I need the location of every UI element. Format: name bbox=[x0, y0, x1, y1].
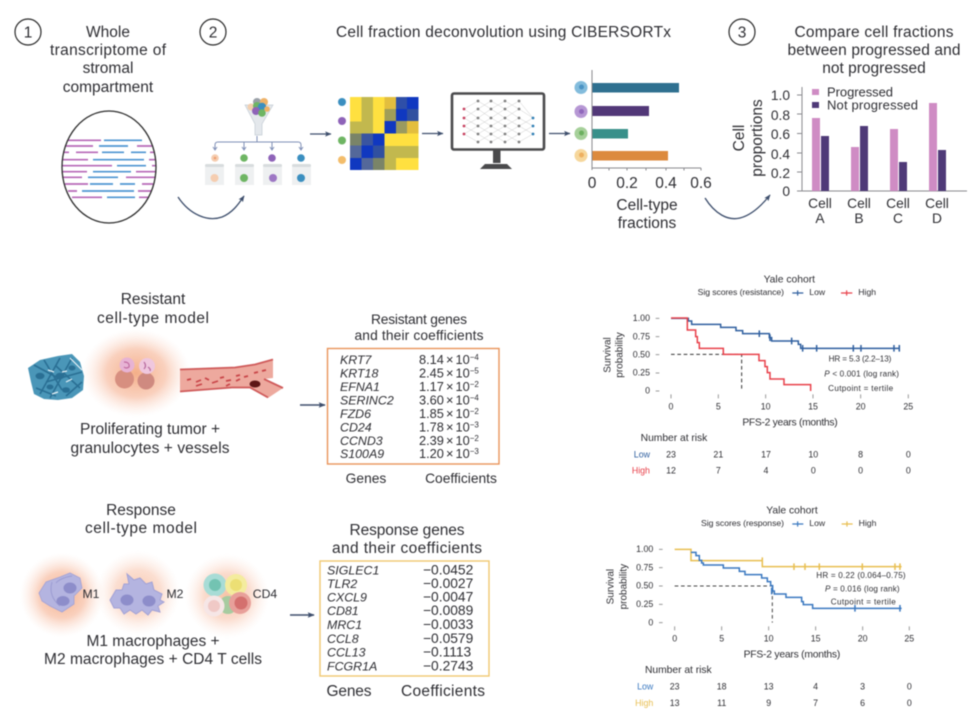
response model caption bbox=[44, 633, 262, 668]
statistics bbox=[824, 355, 899, 393]
statistics: HR = 5.3 (2.2–13) bbox=[829, 355, 892, 364]
gene names: CCL8 bbox=[327, 632, 359, 646]
tick labels bbox=[588, 175, 712, 192]
legend: Progressed bbox=[827, 84, 893, 100]
chart title: Yale cohort bbox=[764, 274, 815, 285]
icon: granulocytes with glow bbox=[82, 329, 190, 417]
number at risk table: 4 bbox=[764, 466, 769, 476]
legend: Sig scores (resistance) bbox=[698, 287, 784, 297]
number at risk table: Low bbox=[634, 449, 651, 459]
coefficients: −4 bbox=[470, 353, 479, 362]
y axis: 0.75 bbox=[633, 331, 650, 341]
resistant table column labels: Coefficients bbox=[425, 471, 497, 486]
number at risk table: 9 bbox=[766, 698, 771, 708]
gene names bbox=[327, 564, 379, 674]
coefficients: −0.0089 bbox=[423, 603, 474, 618]
y axis title bbox=[606, 564, 630, 609]
icon: funnel cell sorting bbox=[205, 98, 311, 185]
x axis: 10 bbox=[764, 634, 774, 644]
category labels bbox=[808, 196, 949, 226]
curved arrow to sorting bbox=[178, 196, 244, 219]
gene names: CCND3 bbox=[340, 434, 383, 448]
coefficients: 3.60 × 10 bbox=[419, 392, 470, 408]
step 1 badge: 1 bbox=[24, 24, 32, 42]
y axis: 0.75 bbox=[636, 562, 653, 572]
step 2 badge bbox=[200, 19, 226, 45]
legend bbox=[701, 518, 877, 528]
transcriptome circle bbox=[62, 111, 157, 223]
coefficients: −3 bbox=[470, 447, 479, 456]
gene names: KRT18 bbox=[340, 366, 378, 380]
number at risk table: 0 bbox=[907, 682, 912, 692]
axis title: Cell-type bbox=[616, 197, 678, 214]
coefficients: −0.1113 bbox=[423, 644, 472, 660]
coefficients: 1.20 × 10 bbox=[419, 446, 470, 461]
x axis: 20 bbox=[856, 402, 866, 412]
step 3 heading: Compare cell fractions bbox=[794, 24, 954, 41]
response genes heading: Response genes bbox=[350, 522, 465, 539]
resistant model caption: Proliferating tumor + bbox=[80, 421, 220, 438]
y axis title: Cell bbox=[731, 125, 748, 151]
coefficients: 1.17 × 10 bbox=[419, 379, 470, 394]
step 1 badge bbox=[15, 19, 41, 45]
y axis: 0.25 bbox=[633, 368, 650, 378]
gene names: CD24 bbox=[340, 420, 372, 434]
statistics: Cutpoint = tertile bbox=[828, 384, 894, 393]
number at risk table: 4 bbox=[813, 682, 818, 692]
number at risk table: Low bbox=[637, 682, 654, 692]
chart title: Yale cohort bbox=[766, 505, 818, 516]
number at risk table: 17 bbox=[761, 449, 771, 459]
number at risk table: 11 bbox=[717, 698, 726, 708]
response model heading bbox=[85, 502, 197, 537]
label M1: M1 bbox=[83, 587, 100, 601]
legend: Not progressed bbox=[827, 98, 918, 112]
low curve bbox=[671, 318, 900, 352]
number at risk table: 7 bbox=[813, 698, 818, 708]
coefficients: −2 bbox=[470, 434, 479, 443]
coefficients: −0.0027 bbox=[423, 576, 473, 591]
step 1 heading: compartment bbox=[63, 79, 154, 96]
low curve bbox=[691, 552, 902, 612]
y axis title: probability bbox=[619, 564, 630, 609]
gene names: FZD6 bbox=[340, 407, 371, 421]
x axis title: PFS-2 years (months) bbox=[742, 418, 838, 429]
number at risk table: 13 bbox=[670, 698, 680, 708]
step 3 heading bbox=[788, 24, 960, 77]
x axis: 10 bbox=[761, 402, 771, 412]
y axis title: Survival bbox=[606, 569, 617, 604]
resistant model caption: granulocytes + vessels bbox=[70, 440, 230, 457]
arrow to monitor bbox=[422, 132, 443, 134]
number at risk table: 10 bbox=[808, 449, 818, 459]
y tick labels: 0.6 bbox=[771, 127, 790, 142]
y axis: 0 bbox=[645, 386, 650, 396]
resistant genes heading: and their coefficients bbox=[354, 328, 484, 343]
step 1 heading bbox=[50, 24, 167, 96]
survival chart: response bbox=[606, 505, 914, 708]
x axis bbox=[669, 394, 913, 412]
neural network bbox=[464, 101, 533, 142]
coefficients: −0.0047 bbox=[423, 590, 473, 604]
y axis title: proportions bbox=[749, 99, 766, 177]
y tick labels: 0.2 bbox=[771, 166, 790, 181]
icon: CD4 T cells bbox=[185, 554, 277, 638]
response table column labels: Genes bbox=[326, 683, 372, 700]
heatmap bbox=[350, 97, 419, 170]
y axis title bbox=[731, 99, 766, 177]
response genes heading bbox=[332, 522, 482, 557]
coefficients bbox=[423, 562, 474, 674]
tick labels: 0.2 bbox=[616, 175, 638, 192]
resistant genes heading bbox=[354, 312, 484, 343]
gene names: SERINC2 bbox=[340, 394, 394, 408]
number at risk table: 21 bbox=[713, 449, 723, 459]
category labels: Cell bbox=[808, 196, 832, 211]
x axis: 5 bbox=[719, 634, 724, 644]
legend: Low bbox=[809, 287, 826, 297]
coefficients: −3 bbox=[470, 420, 479, 430]
step 2 badge: 2 bbox=[209, 24, 217, 42]
response table column labels bbox=[326, 683, 485, 700]
x axis: 15 bbox=[808, 402, 818, 412]
y axis: 1.00 bbox=[633, 313, 650, 323]
y axis title: probability bbox=[615, 332, 626, 378]
arrow to resistant genes bbox=[300, 404, 325, 406]
curved arrow to comparison bbox=[705, 195, 770, 219]
step 3 badge bbox=[729, 19, 755, 45]
y axis bbox=[636, 544, 663, 627]
y axis: 0 bbox=[648, 617, 653, 627]
median dashed guide bbox=[675, 586, 772, 623]
number at risk table: 0 bbox=[907, 698, 912, 708]
step 2 heading: Cell fraction deconvolution using CIBERSORTx bbox=[336, 24, 671, 41]
response model heading: cell-type model bbox=[85, 520, 197, 537]
resistant table column labels: Genes bbox=[346, 471, 386, 486]
x axis: 25 bbox=[904, 634, 914, 644]
coefficients: −4 bbox=[470, 394, 479, 402]
step 1 heading: Whole bbox=[86, 24, 130, 41]
icon: M1 macrophage bbox=[20, 553, 104, 637]
coefficients: −0.0452 bbox=[423, 562, 473, 578]
resistant model heading bbox=[97, 291, 209, 327]
arrow to heatmap bbox=[310, 133, 331, 135]
y tick labels bbox=[771, 88, 790, 199]
number at risk table: 12 bbox=[666, 466, 676, 476]
gene names: TLR2 bbox=[327, 577, 357, 591]
statistics: P < 0.001 (log rank) bbox=[824, 369, 899, 378]
number at risk table: High bbox=[632, 466, 650, 476]
survival chart: resistance bbox=[602, 274, 913, 476]
number at risk table: 0 bbox=[858, 466, 863, 476]
x axis: 15 bbox=[811, 634, 821, 644]
resistant model heading: Resistant bbox=[121, 291, 186, 308]
gene names: MRC1 bbox=[327, 618, 362, 632]
coefficients: −0.2743 bbox=[423, 658, 474, 674]
gene names bbox=[340, 353, 394, 461]
category labels: C bbox=[893, 211, 903, 226]
response table column labels: Coefficients bbox=[401, 683, 485, 700]
coefficients: −0.0033 bbox=[423, 617, 474, 632]
y tick labels: 0.8 bbox=[771, 108, 790, 123]
legend: Sig scores (response) bbox=[701, 518, 784, 528]
label M2: M2 bbox=[167, 587, 184, 601]
cell markers bbox=[574, 81, 588, 162]
number at risk table: 7 bbox=[716, 466, 721, 476]
gene names: KRT7 bbox=[340, 353, 373, 367]
category labels: B bbox=[854, 211, 864, 226]
y tick labels: 1.0 bbox=[771, 88, 790, 103]
axis title bbox=[616, 197, 678, 232]
legend: High bbox=[858, 287, 876, 297]
response model caption: M2 macrophages + CD4 T cells bbox=[44, 651, 262, 668]
number at risk table: 6 bbox=[860, 698, 865, 708]
icon: blood vessel bbox=[180, 359, 283, 398]
y axis: 0.50 bbox=[636, 581, 653, 591]
legend bbox=[698, 287, 876, 297]
legend: Low bbox=[809, 518, 826, 528]
step 3 heading: not progressed bbox=[822, 60, 926, 77]
category labels: A bbox=[815, 211, 825, 226]
coefficients: −5 bbox=[470, 366, 479, 376]
grouped bars bbox=[812, 103, 946, 191]
legend bbox=[812, 84, 918, 112]
tick labels: 0 bbox=[588, 175, 597, 192]
number at risk table: High bbox=[635, 698, 653, 708]
resistant model heading: cell-type model bbox=[97, 310, 209, 327]
response genes table bbox=[320, 561, 489, 676]
x axis: 0 bbox=[672, 634, 677, 644]
bars bbox=[592, 83, 679, 160]
resistant table column labels bbox=[346, 471, 497, 486]
statistics: Cutpoint = tertile bbox=[831, 598, 896, 607]
funnel bbox=[245, 98, 273, 135]
number at risk table: 23 bbox=[670, 682, 680, 692]
step 3 heading: between progressed and bbox=[788, 42, 960, 59]
x axis title: PFS-2 years (months) bbox=[744, 650, 840, 661]
statistics bbox=[816, 571, 906, 607]
y axis: 0.50 bbox=[633, 349, 650, 359]
number at risk table: 18 bbox=[717, 682, 727, 692]
response genes heading: and their coefficients bbox=[332, 540, 482, 557]
coefficients bbox=[419, 352, 479, 461]
tubes bbox=[205, 164, 311, 185]
number at risk table: Number at risk bbox=[641, 433, 708, 444]
number at risk table: 23 bbox=[666, 449, 676, 459]
statistics: P = 0.016 (log rank) bbox=[825, 585, 900, 594]
legend: High bbox=[859, 518, 877, 528]
category labels: Cell bbox=[886, 196, 910, 211]
category labels: Cell bbox=[925, 196, 949, 211]
step 1 heading: stromal bbox=[83, 60, 133, 77]
gene names: CXCL9 bbox=[327, 590, 367, 604]
coefficients: −2 bbox=[470, 407, 479, 416]
coefficients: 1.85 × 10 bbox=[419, 406, 470, 421]
y axis title bbox=[602, 332, 626, 378]
number at risk table: Number at risk bbox=[645, 665, 712, 676]
icon: proliferating tumor bbox=[28, 354, 84, 400]
tick labels: 0.4 bbox=[655, 175, 677, 192]
heatmap row markers bbox=[338, 98, 346, 164]
coefficients: −2 bbox=[470, 380, 479, 389]
category labels: Cell bbox=[847, 196, 871, 211]
axis title: fractions bbox=[618, 215, 677, 232]
statistics: HR = 0.22 (0.064–0.75) bbox=[816, 571, 906, 580]
gene names: SIGLEC1 bbox=[327, 564, 379, 578]
y axis: 0.25 bbox=[636, 599, 653, 609]
icon: M2 macrophage bbox=[96, 551, 184, 635]
icon: monitor with neural network bbox=[452, 94, 544, 169]
x axis: 25 bbox=[903, 402, 913, 412]
median dashed guide bbox=[671, 354, 742, 391]
number at risk table: 0 bbox=[811, 466, 816, 476]
x axis: 20 bbox=[858, 634, 868, 644]
y tick labels: 0.4 bbox=[771, 147, 790, 162]
tick labels: 0.6 bbox=[690, 175, 712, 192]
response model heading: Response bbox=[106, 502, 176, 519]
arrow to bar chart bbox=[549, 132, 570, 134]
number at risk table bbox=[635, 665, 912, 708]
resistant genes heading: Resistant genes bbox=[371, 312, 467, 327]
y tick labels: 0 bbox=[782, 184, 790, 199]
coefficients: 1.78 × 10 bbox=[419, 420, 470, 434]
number at risk table: 3 bbox=[860, 682, 865, 692]
x axis bbox=[672, 626, 914, 644]
number at risk table: 13 bbox=[764, 682, 774, 692]
resistant genes table bbox=[328, 348, 499, 464]
number at risk table: 0 bbox=[906, 466, 911, 476]
category labels: D bbox=[932, 211, 942, 226]
high curve bbox=[675, 549, 902, 570]
number at risk table bbox=[632, 433, 911, 476]
bar chart: cell proportions bbox=[731, 84, 967, 226]
gene names: CD81 bbox=[327, 604, 359, 618]
gene names: EFNA1 bbox=[340, 380, 380, 394]
high curve bbox=[671, 318, 811, 391]
coefficients: −0.0579 bbox=[423, 631, 474, 646]
y axis bbox=[633, 313, 659, 396]
number at risk table: 8 bbox=[858, 449, 863, 459]
step 3 badge: 3 bbox=[738, 24, 746, 42]
gene names: FCGR1A bbox=[327, 660, 377, 674]
gene names: CCL13 bbox=[327, 646, 366, 660]
coefficients: 8.14 × 10 bbox=[419, 352, 470, 367]
step 1 heading: transcriptome of bbox=[50, 42, 167, 59]
x axis: 0 bbox=[669, 402, 674, 412]
gene names: S100A9 bbox=[340, 447, 384, 461]
x axis: 5 bbox=[716, 402, 721, 412]
sorting tree bbox=[213, 136, 303, 150]
coefficients: 2.45 × 10 bbox=[419, 366, 470, 380]
bar chart: cell-type fractions bbox=[574, 70, 712, 232]
sorted cells bbox=[211, 154, 305, 162]
label CD4: CD4 bbox=[253, 587, 277, 601]
y axis title: Survival bbox=[602, 337, 613, 373]
coefficients: 2.39 × 10 bbox=[419, 433, 470, 448]
number at risk table: 0 bbox=[906, 449, 911, 459]
resistant model caption bbox=[70, 421, 230, 457]
y axis: 1.00 bbox=[636, 544, 653, 554]
response model caption: M1 macrophages + bbox=[86, 633, 220, 650]
arrow to response genes bbox=[290, 614, 314, 616]
